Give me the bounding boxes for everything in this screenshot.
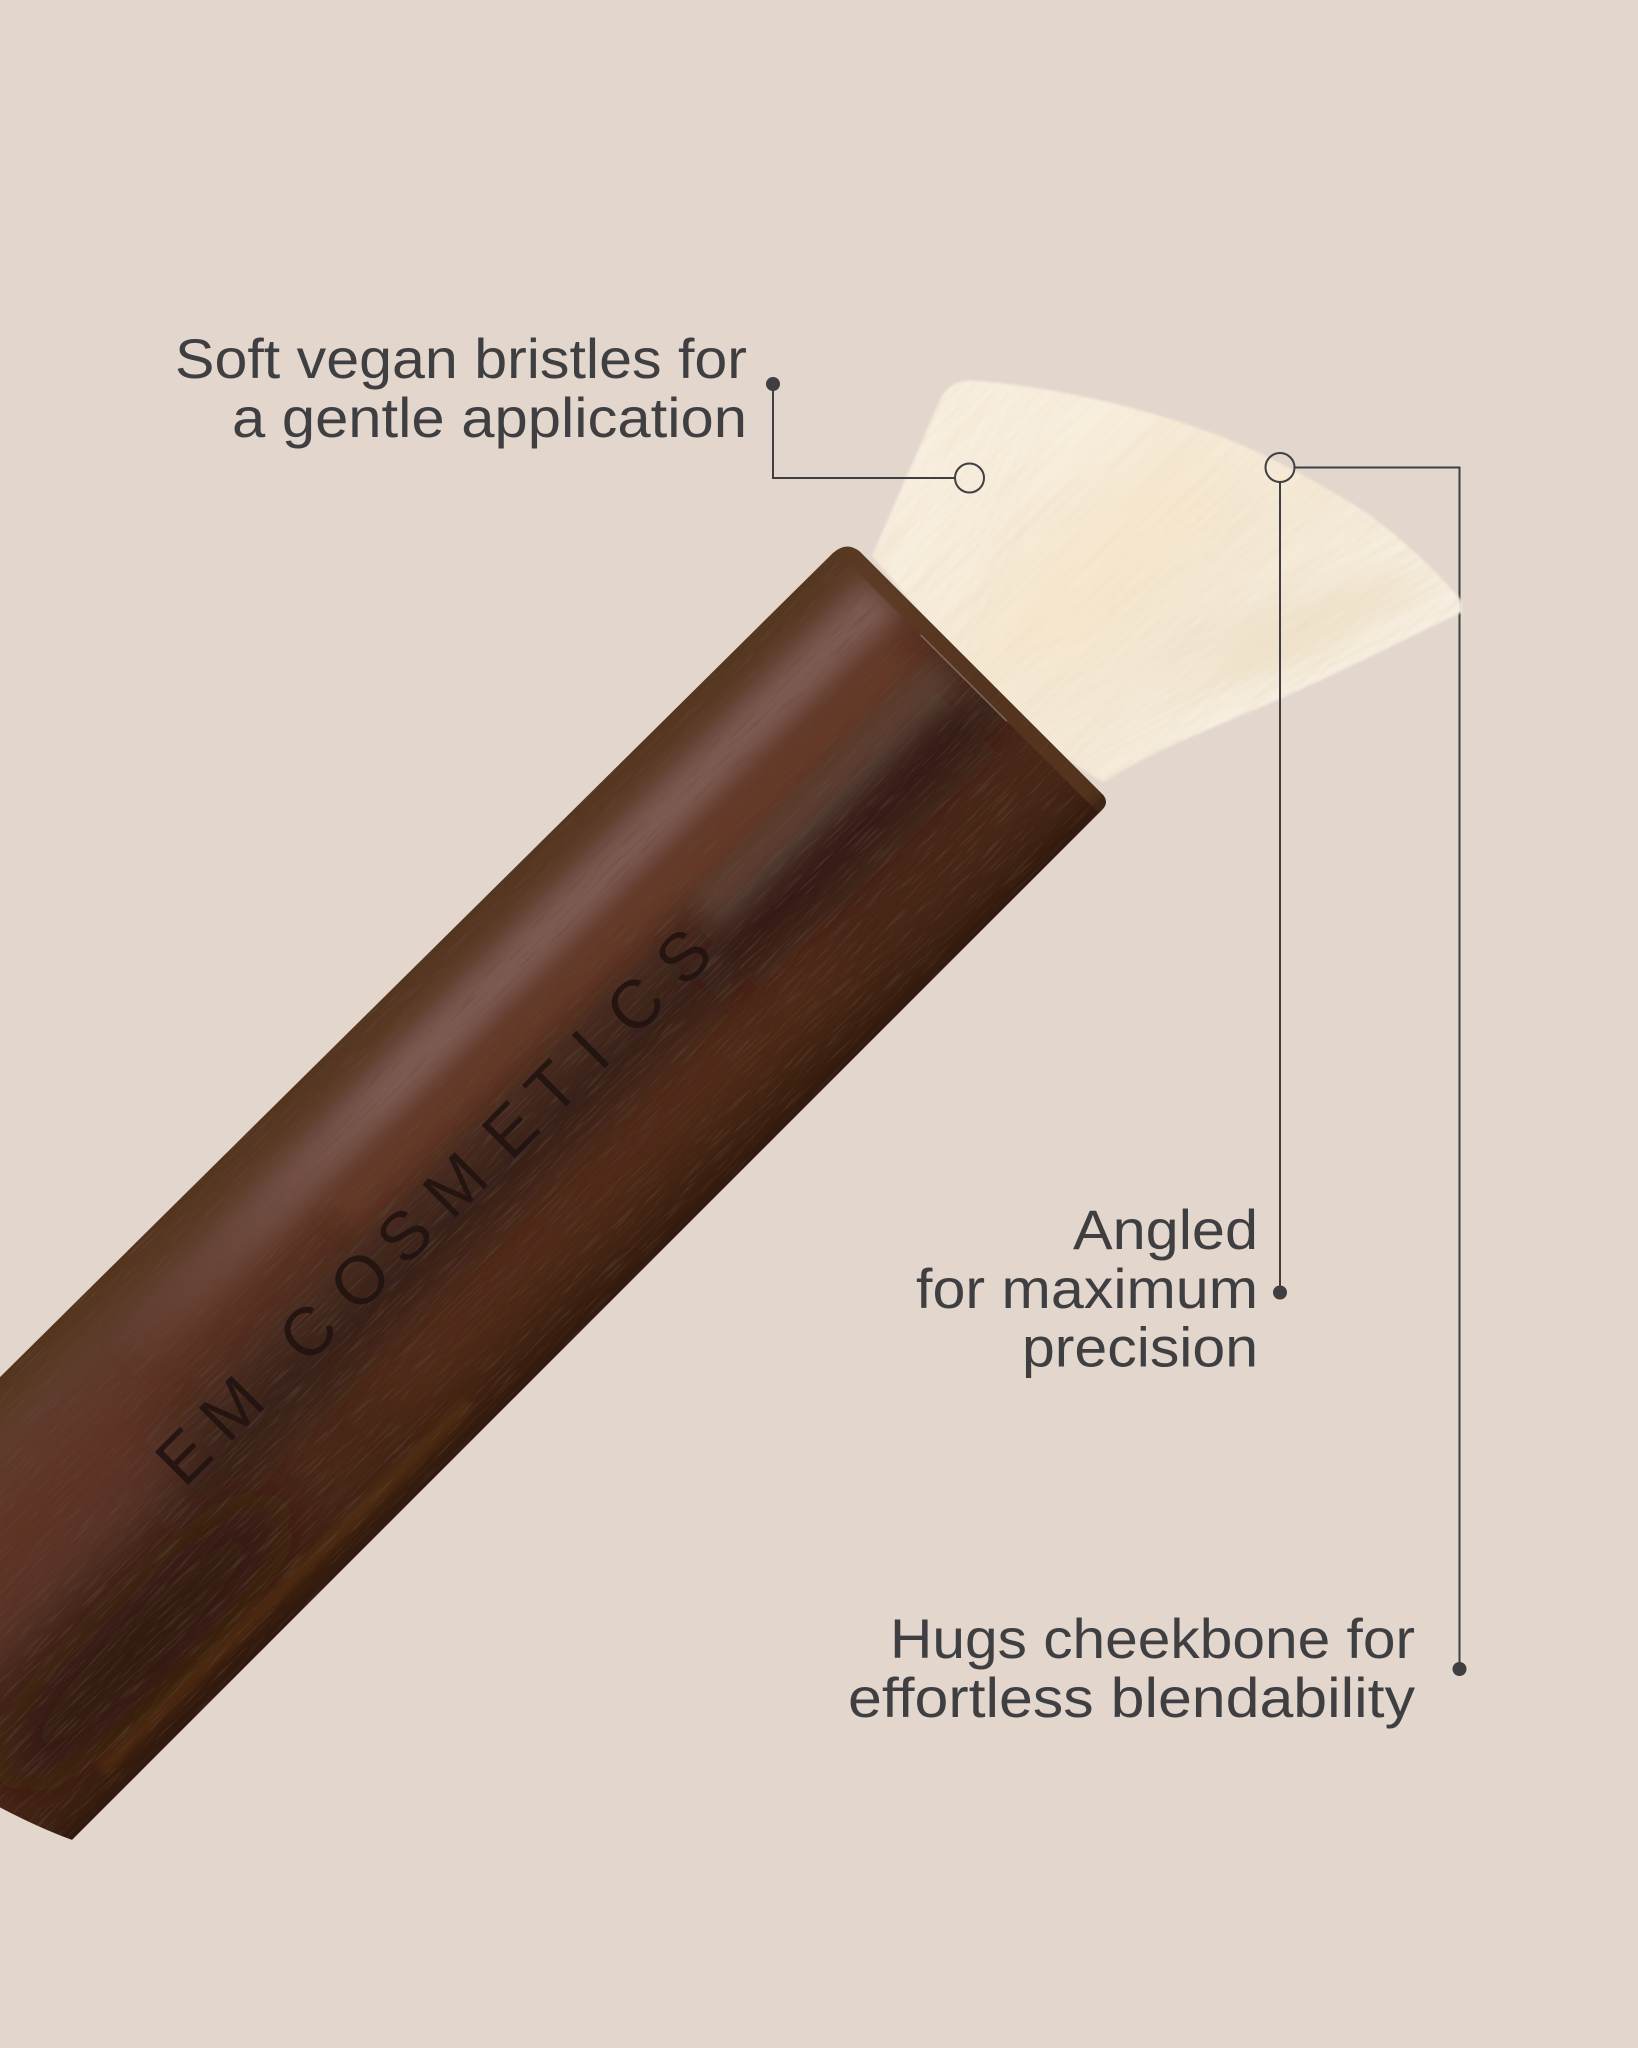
bristles [872,380,1462,782]
leader line with dot and ring [766,377,984,492]
callout text: precision [1022,1316,1258,1378]
dark blotch near ferrule [700,693,997,990]
engraved brand name: EM COSMETICS [141,914,727,1500]
mauve highlight [172,578,902,1312]
fanned hair, lower right [1112,540,1446,774]
leader line: cheekbone callout, passes behind bristle tip [1295,468,1460,1669]
infographic canvas [0,338,1466,1840]
callout: soft vegan bristles [175,327,984,492]
warm lower band [368,933,849,1414]
callout text: effortless blendability [848,1666,1415,1729]
ferrule highlight line [921,635,1007,721]
reddish band [327,638,918,1229]
callout: cheekbone [848,1607,1466,1729]
wood grain [0,558,1094,1838]
grey-brown patch near ferrule [689,661,961,933]
callout text: a gentle application [232,386,747,449]
callout text: Hugs cheekbone for [890,1607,1415,1670]
bristle hair texture [876,392,1458,602]
wood shading [0,580,1082,1872]
brush [0,380,1462,1840]
fanned hair, left side [661,188,1239,812]
warm shading in bristles [1078,529,1414,680]
warm streak near edge [98,1399,472,1773]
reddish left section [0,1443,187,1668]
callout text: Soft vegan bristles for [175,327,747,390]
handle end lip [833,535,1114,816]
dark tip blotch [0,1491,293,1792]
handle [0,516,1131,1895]
lower edge shadow [16,779,1127,1891]
end dot [1452,1662,1466,1676]
callout: angled [916,453,1294,1378]
leader line with dot and ring [1266,453,1294,1300]
callout text: Angled [1073,1198,1258,1261]
dark zone through text [184,961,695,1484]
callout text: for maximum [916,1257,1258,1320]
